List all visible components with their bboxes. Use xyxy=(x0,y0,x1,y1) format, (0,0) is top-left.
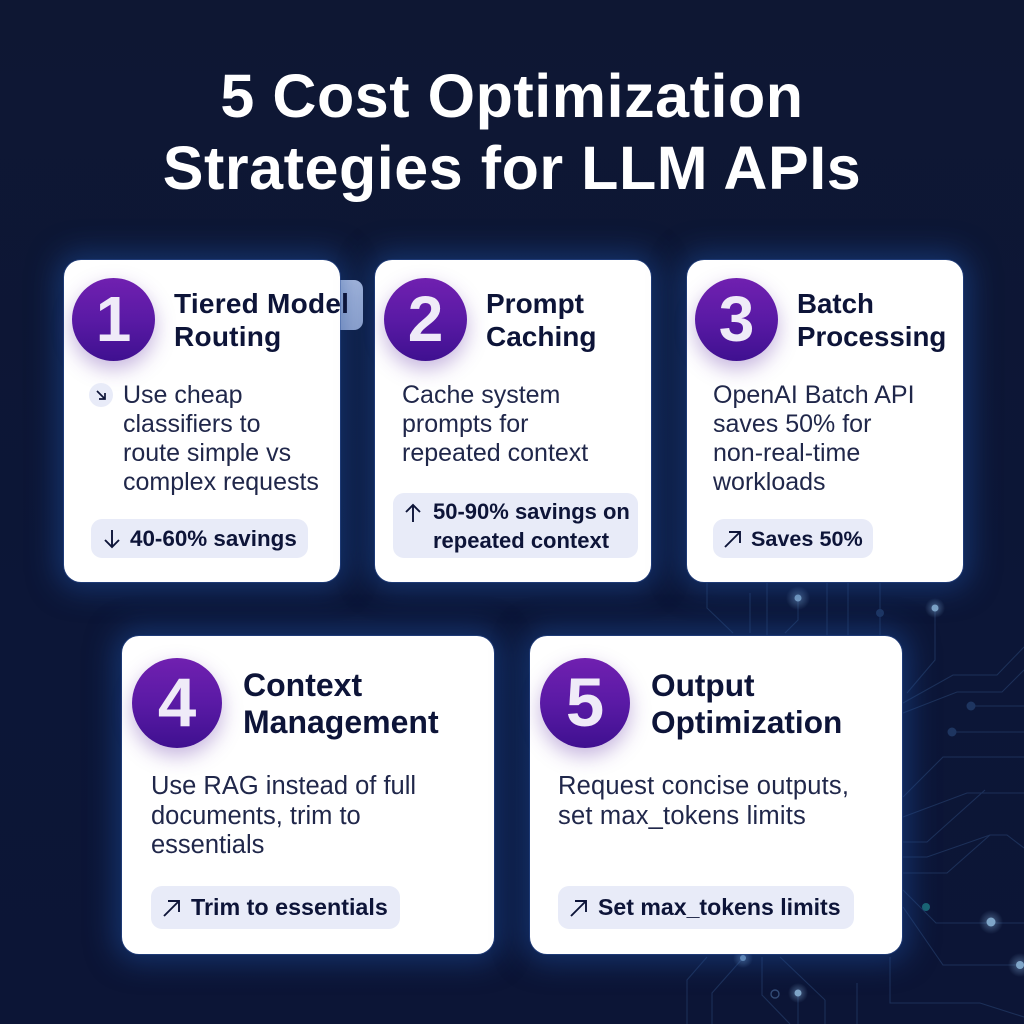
heading 4: Context xyxy=(243,667,362,703)
pill 2: 50-90% savings on xyxy=(433,499,630,524)
number badge 4 xyxy=(132,658,222,748)
body 3: OpenAI Batch API xyxy=(713,381,915,409)
body 2 xyxy=(402,381,588,467)
body 4 xyxy=(151,772,416,859)
icon: small arrow xyxy=(89,383,113,407)
body 2: prompts for xyxy=(402,410,528,438)
heading 1 xyxy=(174,288,349,352)
heading 2: Caching xyxy=(486,321,596,352)
panel: card 1 xyxy=(64,260,340,582)
title: Strategies for LLM APIs xyxy=(163,134,861,202)
body 3: non-real-time xyxy=(713,439,860,467)
heading 5: Optimization xyxy=(651,704,842,740)
panel: card 3 xyxy=(687,260,963,582)
body 3: saves 50% for xyxy=(713,410,871,438)
body 5 xyxy=(558,772,849,830)
heading 2: Prompt xyxy=(486,288,584,319)
body 1: Use cheap xyxy=(123,381,243,409)
body 5: Request concise outputs, xyxy=(558,772,849,800)
heading 5: Output xyxy=(651,667,755,703)
number badge 3: 3 xyxy=(719,283,754,355)
number badge 5: 5 xyxy=(566,664,604,741)
body 3 xyxy=(713,381,915,496)
title: 5 Cost Optimization xyxy=(220,62,804,130)
pill 2: repeated context xyxy=(433,528,609,553)
pill 5 xyxy=(558,886,854,929)
number badge 5 xyxy=(540,658,630,748)
body 1: classifiers to xyxy=(123,410,261,438)
body 1 xyxy=(123,381,319,496)
pill 1 xyxy=(91,519,308,558)
heading 1: Routing xyxy=(174,321,282,352)
pill 3: Saves 50% xyxy=(751,526,863,551)
panel: card 4 xyxy=(122,636,494,954)
heading 1: Tiered Model xyxy=(174,288,349,319)
panel: card 5 xyxy=(530,636,902,954)
heading 2 xyxy=(486,288,596,352)
body 2: Cache system xyxy=(402,381,560,409)
pill 1: 40-60% savings xyxy=(130,526,297,551)
body 4: Use RAG instead of full xyxy=(151,772,416,800)
body 3: workloads xyxy=(713,468,826,496)
number badge 1 xyxy=(72,278,155,361)
heading 4 xyxy=(243,667,439,740)
heading 4: Management xyxy=(243,704,439,740)
pill 2 xyxy=(393,493,638,558)
pill 5: Set max_tokens limits xyxy=(598,894,841,920)
body 4: essentials xyxy=(151,831,264,859)
number badge 3 xyxy=(695,278,778,361)
body 1: route simple vs xyxy=(123,439,291,467)
panel: card 2 xyxy=(375,260,651,582)
heading 3 xyxy=(797,288,946,352)
body 4: documents, trim to xyxy=(151,802,361,830)
pill 3 xyxy=(713,519,873,558)
decorative tab behind card 1 xyxy=(330,280,363,330)
pill 4 xyxy=(151,886,400,929)
title xyxy=(163,62,861,202)
pill 4: Trim to essentials xyxy=(191,894,388,920)
body 2: repeated context xyxy=(402,439,588,467)
heading 5 xyxy=(651,667,842,740)
body 1: complex requests xyxy=(123,468,319,496)
number badge 1: 1 xyxy=(96,283,131,355)
body 5: set max_tokens limits xyxy=(558,802,806,830)
number badge 4: 4 xyxy=(158,664,196,741)
heading 3: Batch xyxy=(797,288,874,319)
number badge 2 xyxy=(384,278,467,361)
heading 3: Processing xyxy=(797,321,946,352)
number badge 2: 2 xyxy=(408,283,443,355)
